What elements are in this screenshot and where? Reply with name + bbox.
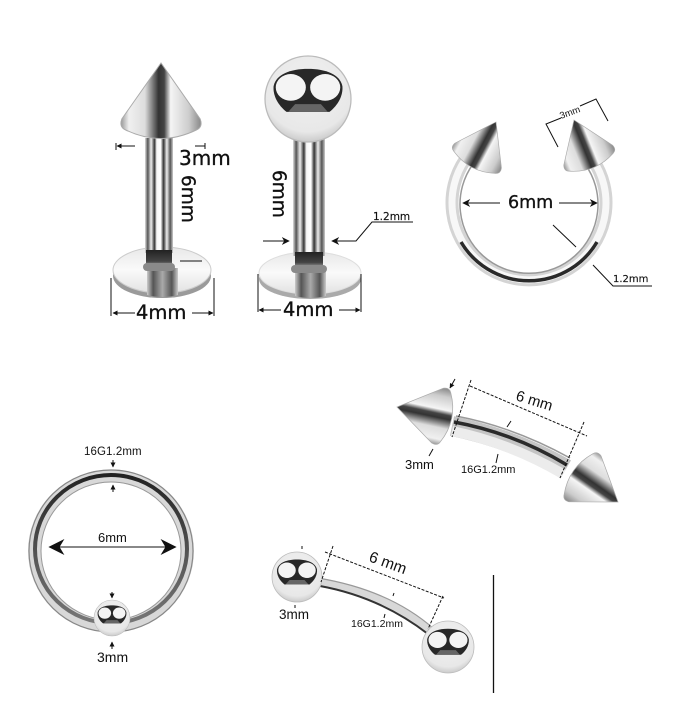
dimension: 3mm	[405, 379, 455, 472]
dimension: 16G1.2mm	[351, 593, 403, 630]
icon: right spike cone	[549, 110, 618, 178]
dimension: 6mm	[321, 546, 444, 629]
dimension: 3mm bracket: 3mm	[558, 104, 582, 122]
dimension: 6mm height: 6mm	[177, 175, 198, 223]
panel: curved barbell with balls	[272, 546, 474, 673]
labret stem	[291, 136, 327, 273]
dimension: 3mm: 3mm	[179, 146, 231, 170]
dimension: 1.2mm	[263, 211, 413, 241]
labret disc base	[259, 252, 361, 299]
dimension: 3mm bracket	[546, 99, 608, 147]
dimension: 16G1.2mm: 16G1.2mm	[461, 464, 515, 476]
dimension: 3mm	[97, 592, 128, 665]
icon: right ball	[422, 621, 474, 673]
horseshoe ring	[452, 160, 606, 281]
dimension: 3mm: 3mm	[405, 457, 434, 472]
icon: left ball	[272, 552, 322, 602]
labret stem	[143, 138, 175, 271]
dimension: 3mm	[279, 546, 309, 622]
dimension: 16G1.2mm	[461, 421, 515, 476]
dimension: 1.2mm: 1.2mm	[613, 274, 648, 285]
dimension: 6mm: 6 mm	[367, 549, 409, 578]
dimension: 6mm: 6mm	[508, 193, 553, 213]
dimension: 16G1.2mm	[84, 446, 142, 492]
icon: left spike cone	[391, 379, 458, 447]
dimension: 4mm width: 4mm	[136, 301, 186, 324]
dimension: 4mm width	[111, 261, 214, 324]
vertical rule	[492, 575, 494, 693]
panel: ball closure ring	[29, 446, 193, 665]
dimension: 6mm	[50, 530, 175, 547]
icon: right spike cone	[557, 447, 634, 525]
closure ring	[29, 470, 193, 632]
dimension: 6mm	[452, 380, 587, 478]
panel: curved barbell with spikes	[391, 379, 634, 525]
dimension: 3mm	[116, 143, 231, 170]
dimension: 6mm: 6 mm	[514, 388, 555, 415]
dimension: 16G1.2mm: 16G1.2mm	[351, 618, 403, 630]
dimension: 6mm: 6mm	[98, 530, 127, 545]
dimension: 16G1.2mm: 16G1.2mm	[84, 446, 142, 458]
curved bar	[318, 578, 434, 634]
labret disc base	[113, 247, 211, 298]
dimension: 4mm width: 4mm	[283, 298, 333, 321]
dimension: 1.2mm: 1.2mm	[373, 211, 410, 223]
dimension: 4mm width	[258, 274, 361, 321]
panel: spike labret	[111, 63, 231, 324]
dimension: 3mm: 3mm	[97, 649, 128, 665]
panel: ball labret	[258, 56, 413, 321]
icon: left spike cone	[448, 109, 520, 180]
dimension: 6mm	[463, 193, 597, 213]
dimension: 3mm: 3mm	[279, 607, 309, 622]
curved bar	[452, 416, 570, 474]
icon: ball	[265, 56, 351, 142]
panel: horseshoe with spikes	[448, 99, 652, 286]
icon: captive ball	[94, 600, 130, 636]
icon: spike cone	[121, 63, 201, 138]
dimension: 6mm height: 6mm	[268, 170, 289, 218]
dimension: 1.2mm	[553, 225, 652, 286]
